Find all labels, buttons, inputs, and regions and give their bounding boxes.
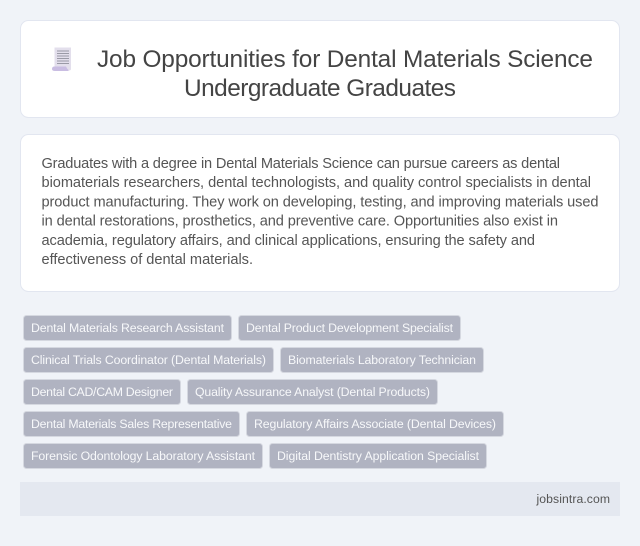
- icon: paper scroll: [52, 48, 71, 71]
- tag: Regulatory Affairs Associate: [246, 412, 504, 436]
- title: [97, 46, 593, 102]
- footer: [20, 482, 620, 516]
- tag: Forensic Odontology Laboratory Assistant: [24, 444, 262, 468]
- tag: Dental Materials Sales Representative: [24, 412, 240, 436]
- tag: Dental CAD/CAM Designer: [24, 380, 180, 404]
- description text: product manufacturing. They work on developing, testing, and improving materials used: [42, 194, 598, 210]
- tag: Biomaterials Laboratory Technician: [280, 348, 484, 372]
- tag: Regulatory Affairs Associate: Regulatory Affairs Associate (Dental Devices): [254, 417, 496, 431]
- tag: Biomaterials Laboratory Technician: Biomaterials Laboratory Technician: [288, 353, 476, 367]
- tag: Digital Dentistry Application Specialist: Digital Dentistry Application Specialist: [277, 449, 480, 463]
- panel: description: [20, 134, 620, 292]
- description text: biomaterials researchers, dental technologists, and quality control specialists in dental: [42, 175, 591, 191]
- tag: Forensic Odontology Laboratory Assistant: Forensic Odontology Laboratory Assistant: [31, 449, 256, 463]
- footer source text: jobsintra.com: [536, 492, 610, 506]
- tag: Clinical Trials Coordinator: Clinical Trials Coordinator (Dental Materials): [31, 353, 266, 367]
- tag: Dental Materials Sales Representative: Dental Materials Sales Representative: [31, 417, 232, 431]
- description text: effectiveness of dental materials.: [42, 252, 253, 268]
- title: Job Opportunities for Dental Materials Science: [97, 46, 593, 73]
- tag: Dental Product Development Specialist: Dental Product Development Specialist: [246, 321, 454, 335]
- tag: Dental Materials Research Assistant: Dental Materials Research Assistant: [31, 321, 225, 335]
- description text: Graduates with a degree in Dental Materials Science can pursue careers as dental: [42, 156, 560, 172]
- tag: Dental CAD/CAM Designer: Dental CAD/CAM Designer: [31, 385, 173, 399]
- job tags: [24, 316, 504, 468]
- description text: academia, regulatory affairs, and clinical applications, ensuring the safety and: [42, 233, 535, 249]
- description text: [42, 156, 598, 268]
- description text: in dental restorations, prosthetics, and preventive care. Opportunities also exist in: [42, 214, 558, 230]
- panel: title header: [20, 20, 620, 118]
- tag: Quality Assurance Analyst: [188, 380, 438, 404]
- tag: Digital Dentistry Application Specialist: [270, 444, 486, 468]
- tag: Quality Assurance Analyst: Quality Assurance Analyst (Dental Products): [195, 385, 430, 399]
- tag: Dental Product Development Specialist: [238, 316, 460, 340]
- tag: Dental Materials Research Assistant: [24, 316, 232, 340]
- tag: Clinical Trials Coordinator: [24, 348, 274, 372]
- title: Undergraduate Graduates: [184, 75, 456, 102]
